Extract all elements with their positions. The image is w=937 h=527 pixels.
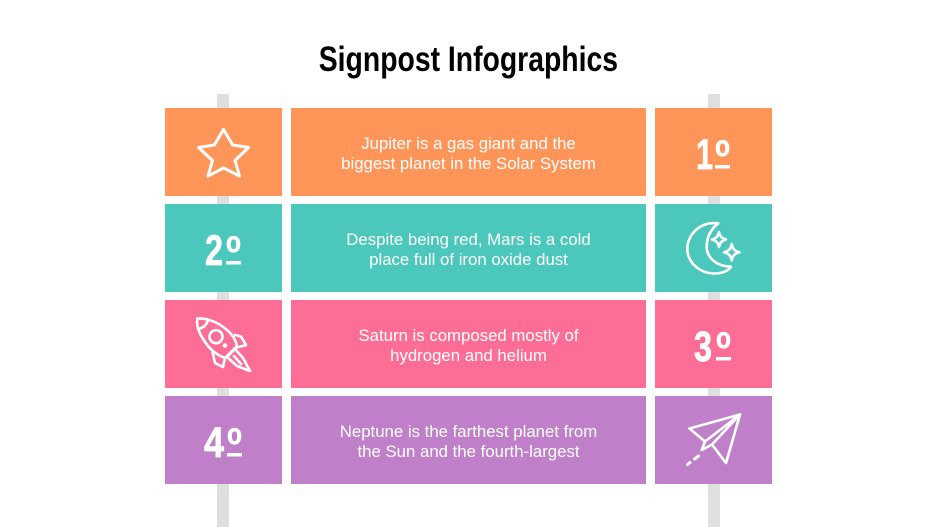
number 4: 4 <box>204 419 224 467</box>
row 4 icon panel: paper plane <box>655 396 772 484</box>
row 2 number panel <box>165 204 282 292</box>
row 2 text panel <box>291 204 646 292</box>
number 3 <box>694 322 731 371</box>
left signpost pole <box>217 94 229 527</box>
number 2 <box>205 226 241 275</box>
row 2 text panel: place full of iron oxide dust <box>369 250 568 269</box>
title: Signpost Infographics <box>319 40 618 79</box>
number 1: 1 <box>696 131 713 179</box>
row 2 text panel: Despite being red, Mars is a cold <box>346 230 591 248</box>
row 1 text panel: Jupiter is a gas giant and the <box>361 134 576 152</box>
number 1: o <box>715 130 730 163</box>
right signpost pole <box>708 94 720 527</box>
row 4 number panel <box>165 396 282 484</box>
row 4 text panel: the Sun and the fourth-largest <box>357 442 580 461</box>
icon: rocket <box>196 317 252 372</box>
row 1 text panel <box>291 108 646 196</box>
row 3 text panel: Saturn is composed mostly of <box>358 326 579 344</box>
row 3 icon panel: rocket <box>165 300 282 388</box>
number 3: o <box>716 322 731 355</box>
row 1 number panel <box>655 108 772 196</box>
row 2 icon panel: moon <box>655 204 772 292</box>
number 2: 2 <box>205 227 223 275</box>
row 1 icon panel: star <box>165 108 282 196</box>
number 4 <box>204 418 242 467</box>
icon: paper plane <box>686 413 742 466</box>
number 1 <box>696 130 730 179</box>
row 1 text panel: biggest planet in the Solar System <box>341 154 596 173</box>
number 3: 3 <box>694 323 712 371</box>
row 4 text panel: Neptune is the farthest planet from <box>340 422 597 440</box>
number 4: o <box>227 418 242 451</box>
row 4 text panel <box>291 396 646 484</box>
row 3 text panel <box>291 300 646 388</box>
number 2: o <box>226 226 241 259</box>
icon: star <box>196 128 250 178</box>
row 3 text panel: hydrogen and helium <box>390 346 547 365</box>
icon: moon and stars <box>686 222 741 275</box>
row 3 number panel <box>655 300 772 388</box>
